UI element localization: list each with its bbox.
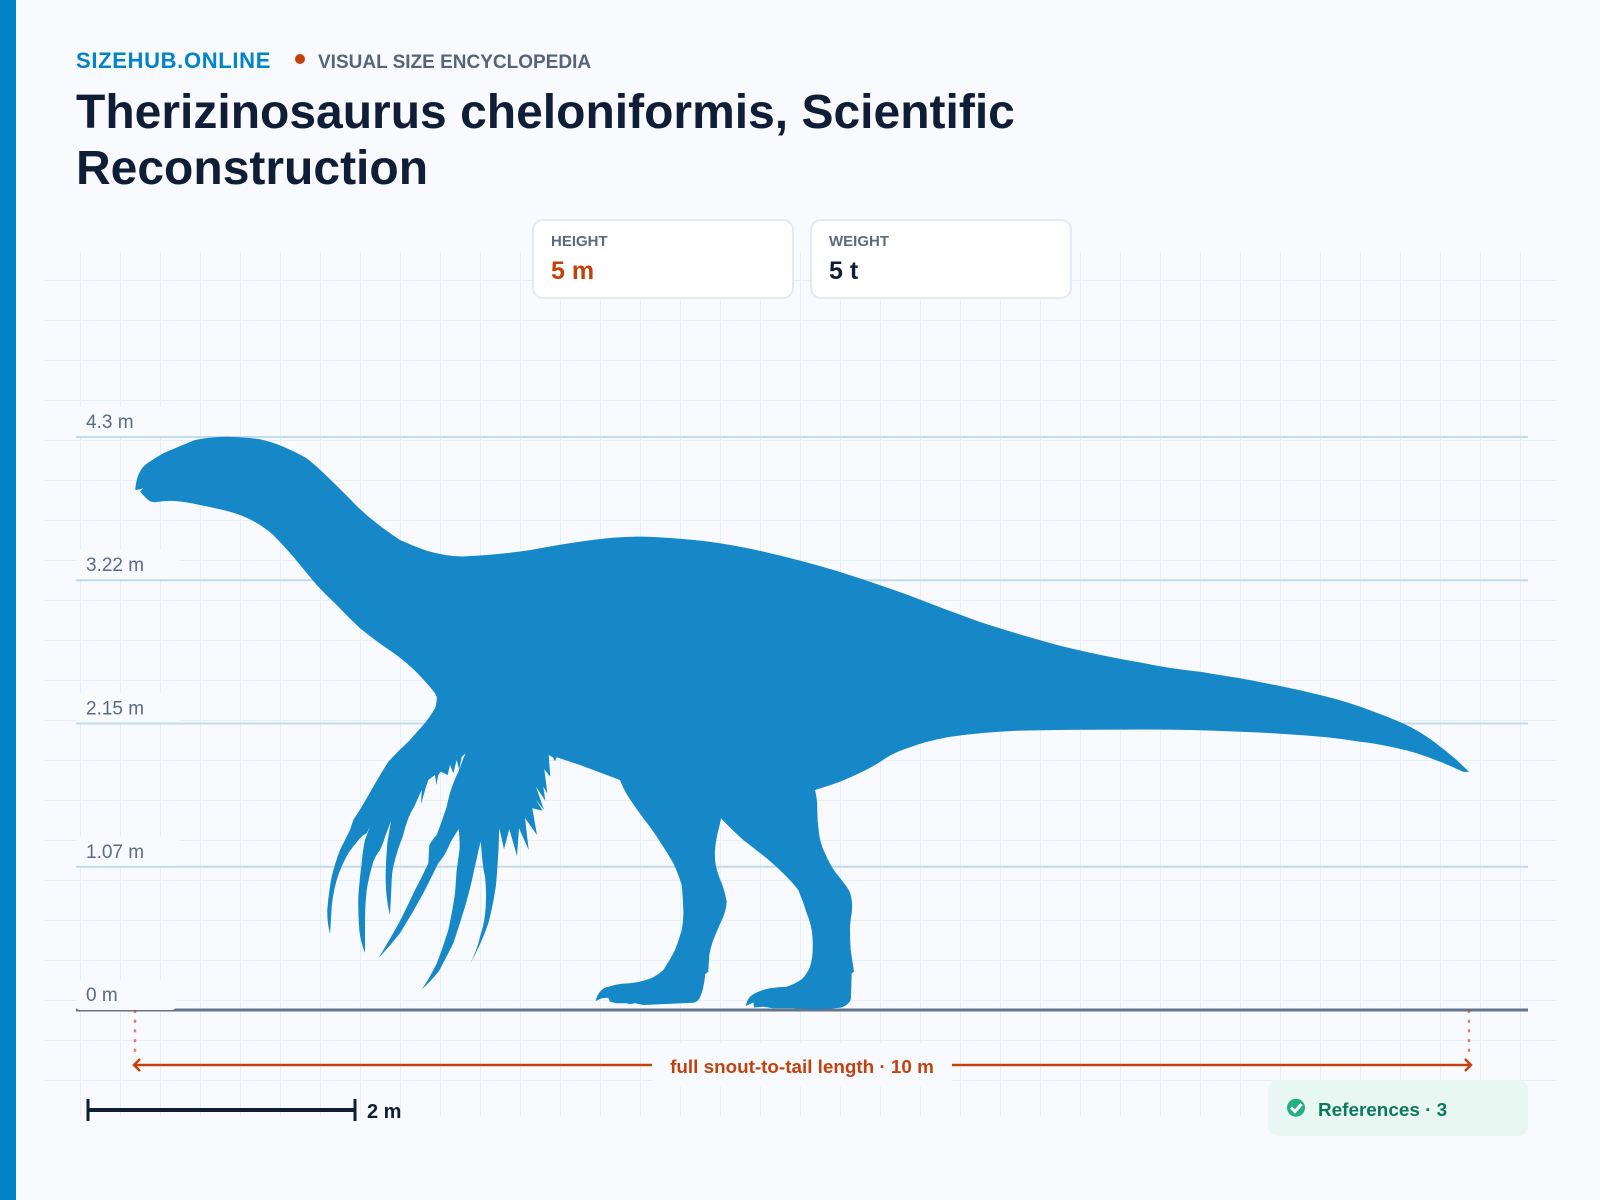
header: brand line <box>76 48 591 73</box>
stat card: height: HEIGHT <box>551 233 608 250</box>
reference lines with height labels: 1.07 m <box>86 842 144 863</box>
stat card: weight: 5 t <box>829 257 859 285</box>
silhouette: Therizinosaurus <box>135 437 1469 1009</box>
reference lines with height labels: 2.15 m <box>86 698 144 720</box>
title: Reconstruction <box>76 142 428 195</box>
icon: check <box>1287 1099 1305 1117</box>
title <box>76 86 1015 195</box>
reference lines with height labels: 4.3 m <box>86 412 134 433</box>
stat card: height <box>533 220 793 298</box>
stat card: weight <box>811 220 1071 298</box>
references badge <box>1268 1080 1528 1136</box>
reference lines with height labels: 3.22 m <box>86 555 144 576</box>
length measure: dotted guides, arrow and label <box>134 1010 1471 1087</box>
stat card: height: 5 m <box>551 257 594 285</box>
header: brand line: VISUAL SIZE ENCYCLOPEDIA <box>318 52 591 73</box>
stat card: weight: WEIGHT <box>829 233 889 250</box>
scale bar: 2 m: 2 m <box>367 1101 401 1123</box>
title: Therizinosaurus cheloniformis, Scientific <box>76 86 1015 139</box>
reference lines with height labels <box>76 407 1528 1010</box>
reference lines with height labels: 0 m <box>86 985 118 1006</box>
references badge: References · 3 <box>1318 1100 1447 1121</box>
left accent bar <box>0 0 16 1200</box>
scale bar: 2 m <box>88 1099 401 1123</box>
length measure: dotted guides, arrow and label: full snout-to-tail length · 10 m <box>670 1056 934 1077</box>
header: brand line: SIZEHUB.ONLINE <box>76 48 271 73</box>
